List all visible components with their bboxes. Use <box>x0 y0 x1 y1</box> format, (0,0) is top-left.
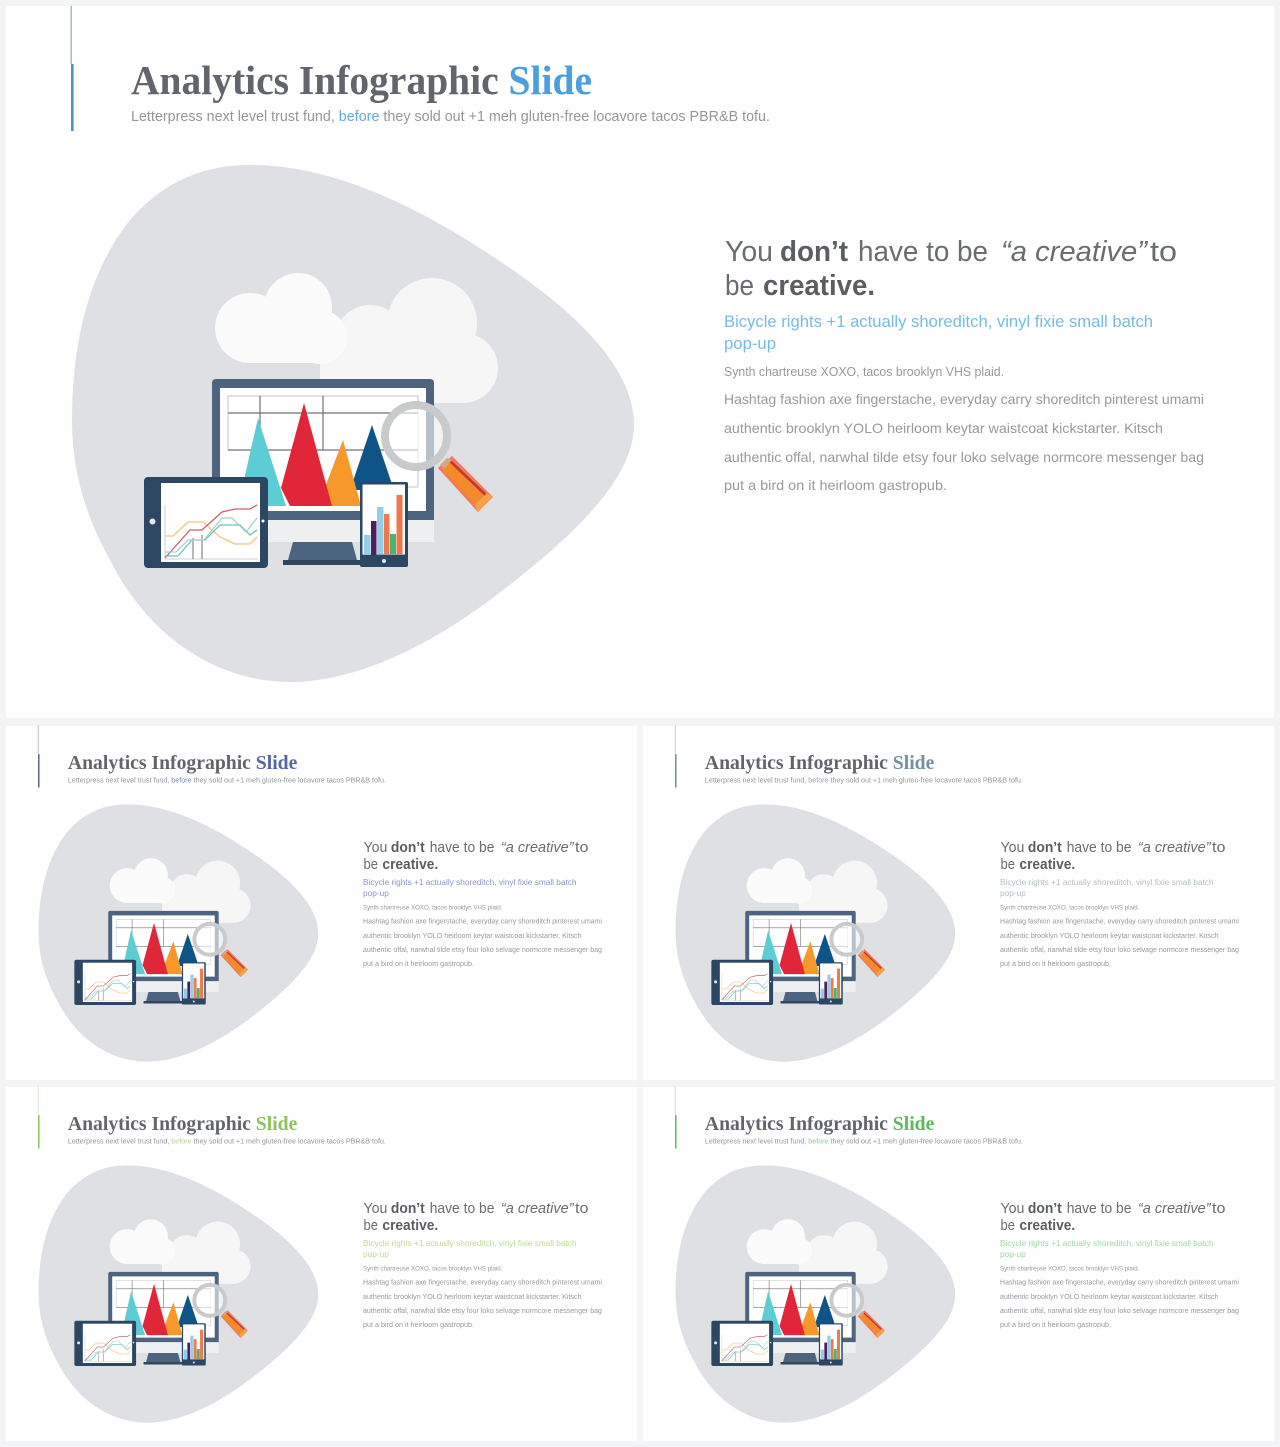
body text <box>724 364 1204 493</box>
illustration <box>711 1219 888 1366</box>
body text: Synth chartreuse XOXO, tacos brooklyn VHS plaid. <box>724 364 1004 379</box>
heading: be <box>725 270 754 302</box>
body text: authentic offal, narwhal tilde etsy four loko selvage normcore messenger bag <box>363 947 602 954</box>
body text: Hashtag fashion axe fingerstache, everyday carry shoreditch pinterest umami <box>724 391 1204 407</box>
panel: slide variant, green <box>643 1086 1274 1441</box>
illustration <box>711 858 888 1005</box>
body text <box>1000 1265 1239 1329</box>
highlighted subheading: Bicycle rights +1 actually shoreditch, vinyl fixie small batch <box>363 1238 577 1248</box>
triangle chart <box>238 403 394 506</box>
highlighted subheading <box>1000 1238 1214 1259</box>
heading <box>1001 840 1225 873</box>
heading: be <box>1001 1218 1015 1234</box>
body text: Synth chartreuse XOXO, tacos brooklyn VHS plaid. <box>1000 1265 1140 1272</box>
icon: back cloud <box>320 278 498 403</box>
body text <box>363 1265 602 1329</box>
heading: to <box>575 1201 588 1217</box>
heading: don’t <box>1028 1201 1062 1217</box>
body text: Synth chartreuse XOXO, tacos brooklyn VHS plaid. <box>363 1265 503 1272</box>
blob background <box>39 1165 318 1423</box>
title: Analytics Infographic Slide <box>705 752 934 774</box>
illustration <box>74 1219 251 1366</box>
illustration: analytics devices <box>144 273 498 568</box>
body text: Hashtag fashion axe fingerstache, everyday carry shoreditch pinterest umami <box>363 918 602 925</box>
heading: to <box>1212 840 1225 856</box>
heading: have to be <box>858 236 988 268</box>
body text: put a bird on it heirloom gastropub. <box>363 1322 474 1329</box>
icon: front cloud <box>215 273 347 364</box>
blob background <box>676 804 955 1062</box>
panel: main slide, blue <box>6 6 1274 718</box>
body text: authentic offal, narwhal tilde etsy four loko selvage normcore messenger bag <box>1000 1308 1239 1315</box>
heading: don’t <box>391 1201 425 1217</box>
heading: creative. <box>382 1218 438 1234</box>
heading: “a creative” <box>501 1201 575 1217</box>
body text <box>363 904 602 968</box>
subtitle: Letterpress next level trust fund, before they sold out +1 meh gluten-free locavore tacos PBR&B tofu. <box>68 776 386 785</box>
highlighted subheading: pop-up <box>363 888 389 898</box>
heading: You <box>364 1201 387 1217</box>
phone <box>360 482 408 567</box>
panel: slide variant, indigo <box>6 725 637 1080</box>
heading: have to be <box>430 840 494 856</box>
highlighted subheading: Bicycle rights +1 actually shoreditch, vinyl fixie small batch <box>1000 1238 1214 1248</box>
heading: creative. <box>763 270 875 302</box>
heading: creative. <box>382 857 438 873</box>
heading: to <box>1150 236 1177 268</box>
body text: authentic brooklyn YOLO heirloom keytar waistcoat kickstarter. Kitsch <box>1000 1294 1219 1301</box>
heading: be <box>364 857 378 873</box>
heading: You <box>364 840 387 856</box>
heading: have to be <box>1067 840 1131 856</box>
heading: “a creative” <box>1138 1201 1212 1217</box>
heading <box>725 236 1177 302</box>
heading: “a creative” <box>1001 236 1148 268</box>
highlighted subheading: Bicycle rights +1 actually shoreditch, vinyl fixie small batch <box>724 312 1153 331</box>
tablet <box>144 477 268 568</box>
highlighted subheading <box>363 1238 577 1259</box>
magnifying glass <box>385 405 493 512</box>
heading: have to be <box>430 1201 494 1217</box>
title: Analytics Infographic Slide <box>131 57 592 103</box>
body text: Synth chartreuse XOXO, tacos brooklyn VHS plaid. <box>1000 904 1140 911</box>
body text: authentic offal, narwhal tilde etsy four loko selvage normcore messenger bag <box>363 1308 602 1315</box>
body text: put a bird on it heirloom gastropub. <box>1000 961 1111 968</box>
accent line <box>675 1086 677 1148</box>
heading: have to be <box>1067 1201 1131 1217</box>
monitor <box>212 379 434 565</box>
subtitle: Letterpress next level trust fund, before they sold out +1 meh gluten-free locavore tacos PBR&B tofu. <box>68 1137 386 1146</box>
heading: to <box>575 840 588 856</box>
heading: be <box>364 1218 378 1234</box>
body text: put a bird on it heirloom gastropub. <box>724 477 947 493</box>
body text: Hashtag fashion axe fingerstache, everyday carry shoreditch pinterest umami <box>1000 918 1239 925</box>
body text: authentic brooklyn YOLO heirloom keytar waistcoat kickstarter. Kitsch <box>724 420 1163 436</box>
blob background <box>72 165 634 682</box>
heading: “a creative” <box>1138 840 1212 856</box>
panel: slide variant, slate <box>643 725 1274 1080</box>
heading: You <box>725 236 773 268</box>
heading: don’t <box>391 840 425 856</box>
body text <box>1000 904 1239 968</box>
heading: “a creative” <box>501 840 575 856</box>
subtitle: Letterpress next level trust fund, before they sold out +1 meh gluten-free locavore tacos PBR&B tofu. <box>705 1137 1023 1146</box>
highlighted subheading: pop-up <box>1000 888 1026 898</box>
body text: authentic offal, narwhal tilde etsy four loko selvage normcore messenger bag <box>1000 947 1239 954</box>
heading: be <box>1001 857 1015 873</box>
body text: Hashtag fashion axe fingerstache, everyday carry shoreditch pinterest umami <box>363 1279 602 1286</box>
body text: Hashtag fashion axe fingerstache, everyday carry shoreditch pinterest umami <box>1000 1279 1239 1286</box>
heading <box>1001 1201 1225 1234</box>
heading: don’t <box>1028 840 1062 856</box>
title: Analytics Infographic Slide <box>68 752 297 774</box>
highlighted subheading: pop-up <box>1000 1249 1026 1259</box>
body text: put a bird on it heirloom gastropub. <box>1000 1322 1111 1329</box>
body text: authentic brooklyn YOLO heirloom keytar waistcoat kickstarter. Kitsch <box>363 933 582 940</box>
heading: You <box>1001 1201 1024 1217</box>
chart grid <box>228 396 418 487</box>
panel: slide variant, lime <box>6 1086 637 1441</box>
heading: don’t <box>780 236 848 268</box>
highlighted subheading: Bicycle rights +1 actually shoreditch, vinyl fixie small batch <box>1000 877 1214 887</box>
accent line <box>38 725 40 787</box>
highlighted subheading <box>1000 877 1214 898</box>
accent line <box>70 6 74 131</box>
blob background <box>676 1165 955 1423</box>
body text: put a bird on it heirloom gastropub. <box>363 961 474 968</box>
bar chart <box>364 495 402 555</box>
highlighted subheading: Bicycle rights +1 actually shoreditch, vinyl fixie small batch <box>363 877 577 887</box>
title: Analytics Infographic Slide <box>705 1113 934 1135</box>
body text: Synth chartreuse XOXO, tacos brooklyn VHS plaid. <box>363 904 503 911</box>
title: Analytics Infographic Slide <box>68 1113 297 1135</box>
subtitle: Letterpress next level trust fund, before they sold out +1 meh gluten-free locavore tacos PBR&B tofu. <box>705 776 1023 785</box>
heading: creative. <box>1019 1218 1075 1234</box>
heading <box>364 1201 588 1234</box>
heading: to <box>1212 1201 1225 1217</box>
accent line <box>38 1086 40 1148</box>
heading: You <box>1001 840 1024 856</box>
line chart <box>165 505 258 559</box>
body text: authentic brooklyn YOLO heirloom keytar waistcoat kickstarter. Kitsch <box>363 1294 582 1301</box>
body text: authentic brooklyn YOLO heirloom keytar waistcoat kickstarter. Kitsch <box>1000 933 1219 940</box>
subtitle: Letterpress next level trust fund, before they sold out +1 meh gluten-free locavore tacos PBR&B tofu. <box>131 109 770 125</box>
heading <box>364 840 588 873</box>
blob background <box>39 804 318 1062</box>
accent line <box>675 725 677 787</box>
body text: authentic offal, narwhal tilde etsy four loko selvage normcore messenger bag <box>724 449 1204 465</box>
highlighted subheading <box>363 877 577 898</box>
highlighted subheading <box>724 312 1153 353</box>
illustration <box>74 858 251 1005</box>
highlighted subheading: pop-up <box>363 1249 389 1259</box>
highlighted subheading: pop-up <box>724 334 776 353</box>
heading: creative. <box>1019 857 1075 873</box>
